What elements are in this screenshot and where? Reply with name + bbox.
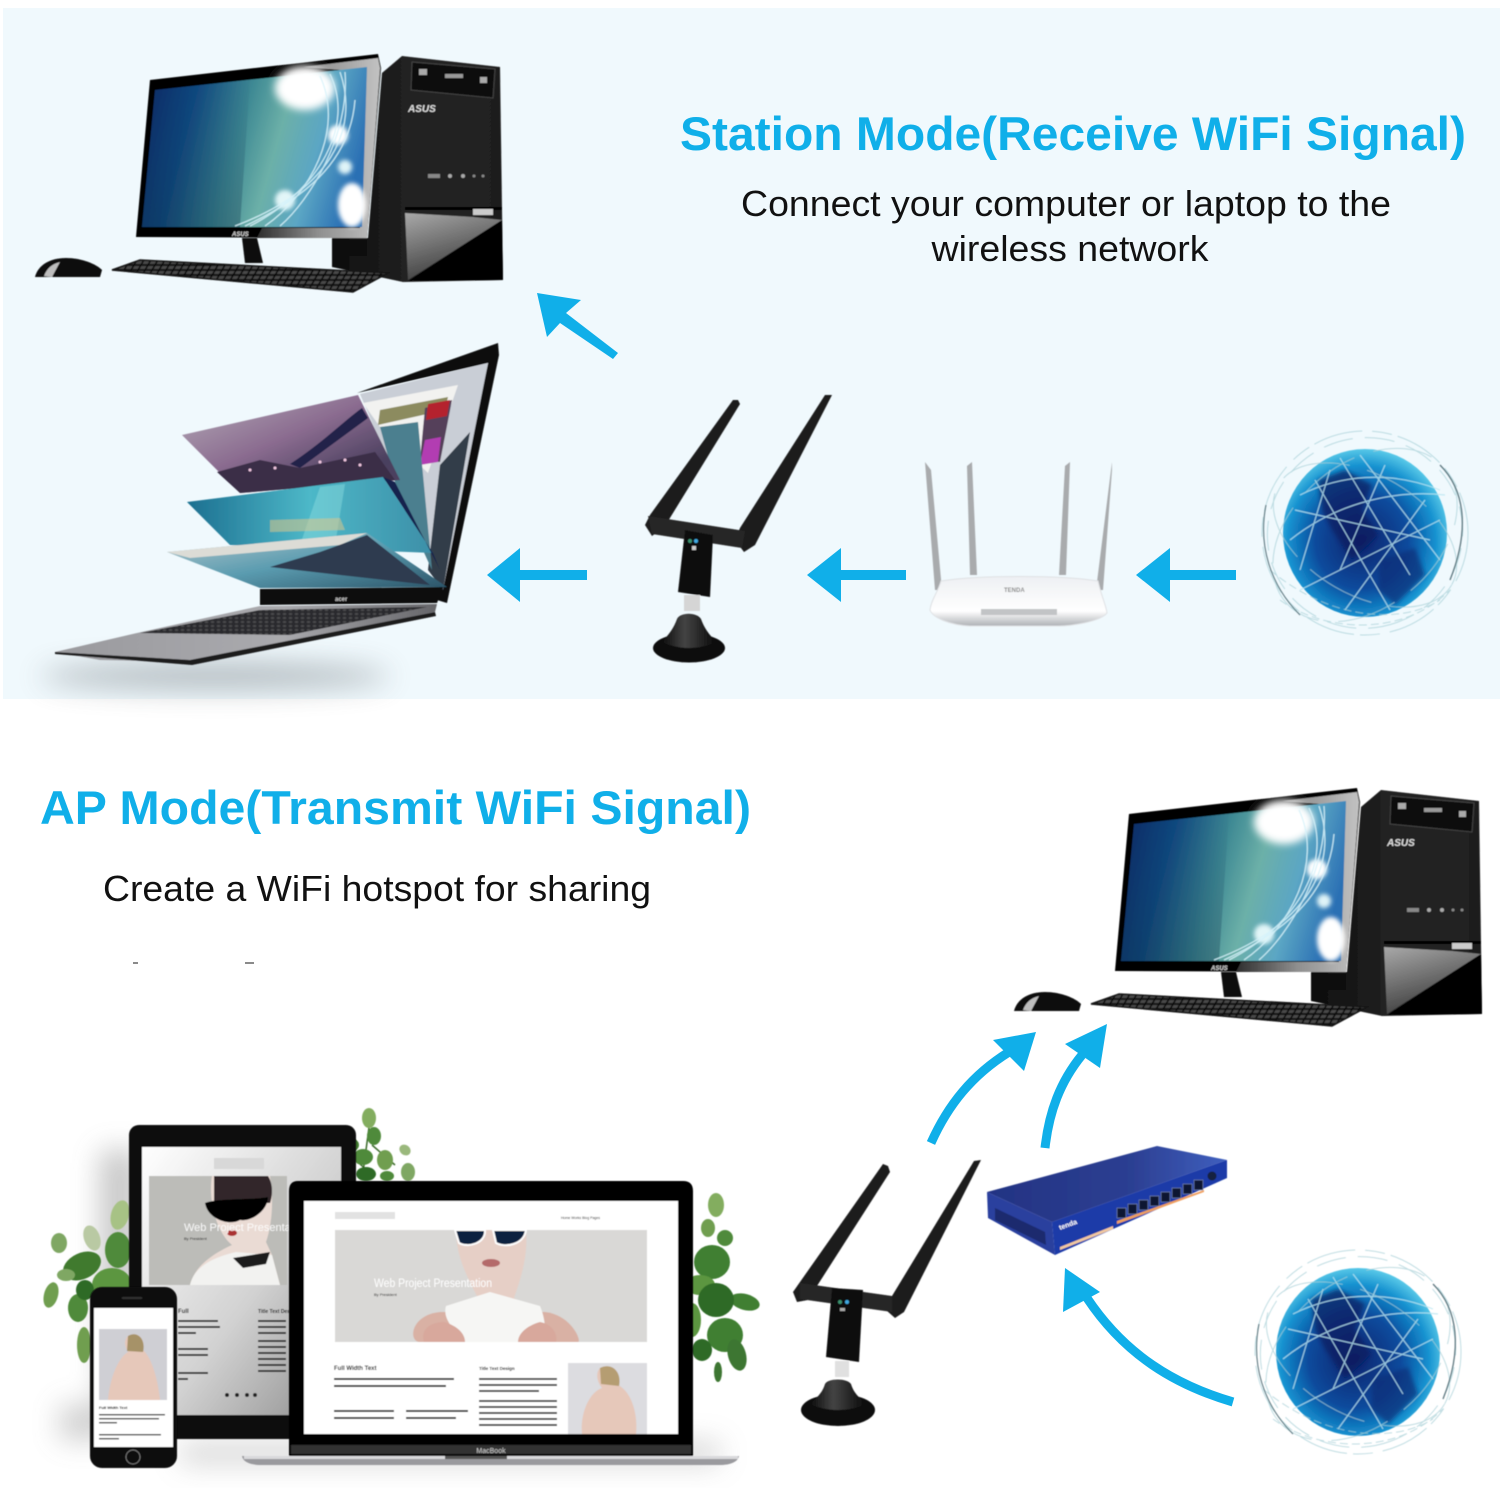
icon: desktop computer (AP mode): ASUS [1210,966,1228,972]
plant: left [41,1198,133,1363]
icon: desktop computer (station mode): ASUS [231,232,249,238]
arrow: adapter to desktop [537,293,618,359]
device: tablet: By President [184,1236,208,1241]
title: station mode: Station Mode(Receive WiFi Signal) [680,107,1466,160]
device: tablet: Web Project Presentation [184,1222,309,1234]
device: laptop: MacBook [476,1448,506,1455]
text block: station mode description: Connect your computer or laptop to the [741,183,1391,224]
plant: top [336,1108,415,1181]
device: laptop: Title Text Design [479,1366,515,1371]
device: laptop: Home Works Blog Pages [561,1216,600,1220]
arrow: switch to desktop (AP mode) [1045,1024,1107,1148]
laptop shadow [40,663,390,689]
arrow: internet to switch [1063,1268,1233,1402]
text block: station mode description: wireless network [930,228,1210,269]
text block: station mode description [741,183,1391,269]
arrow: router to adapter [807,548,906,602]
icon: desktop computer (station mode) [35,54,503,292]
icon: network switch [987,1146,1227,1255]
arrow: internet to router [1136,548,1236,602]
icon: desktop computer (AP mode): ASUS [1386,838,1415,849]
icon: laptop with layered screens [40,343,499,689]
marks: stray specks [133,962,254,964]
device: laptop: By President [374,1292,398,1297]
icon: wifi router [925,462,1112,626]
icon: globe (AP mode) [1232,1229,1484,1476]
device: tablet: Title Text Design [258,1309,298,1315]
device: phone: Full Width Text [99,1405,128,1410]
device: laptop: Web Project Presentation [374,1278,492,1290]
icon: desktop computer (station mode): ASUS [407,104,436,115]
icon: usb wifi adapter (station mode) [645,395,832,662]
arrow: adapter to desktop (AP mode) [931,1032,1036,1143]
panel: station mode background [3,8,1500,699]
icon: desktop computer (AP mode) [1014,788,1482,1026]
icon: wifi router: TENDA [1004,588,1025,594]
device: phone [90,1287,177,1468]
device shadows [60,1150,720,1464]
device: laptop [242,1181,739,1465]
device: laptop: Full Width Text [334,1366,376,1372]
icon: laptop with layered screens: acer [335,597,348,603]
icon: usb wifi adapter (AP mode) [793,1160,981,1426]
device: tablet [129,1125,356,1439]
plant: right [683,1193,762,1382]
device: tablet: Full [178,1309,189,1315]
icon: globe (station mode) [1239,410,1491,657]
text block: AP mode description: Create a WiFi hotspot for sharing [103,868,651,909]
illustration: responsive devices group [41,1108,762,1468]
arrow: adapter to laptop [487,548,587,602]
icon: network switch: tenda [1058,1219,1078,1232]
title: AP mode: AP Mode(Transmit WiFi Signal) [40,781,751,834]
